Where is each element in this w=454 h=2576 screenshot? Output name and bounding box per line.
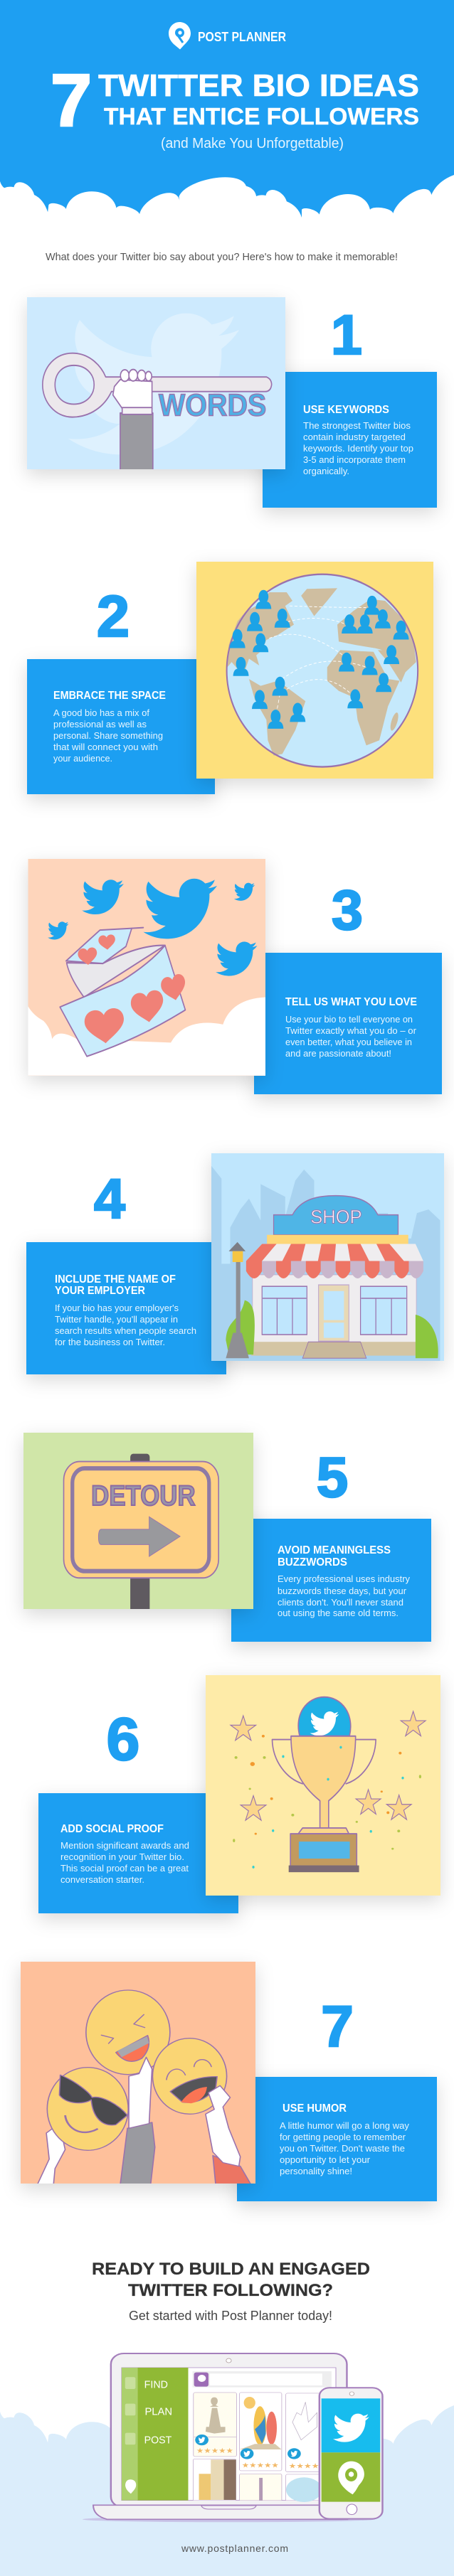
- number 1: 1: [331, 303, 362, 366]
- illustration: globe with people: [196, 562, 433, 779]
- number 4: 4: [94, 1167, 125, 1230]
- text card: use humor: [237, 2077, 437, 2201]
- small tower and globe: [259, 2478, 263, 2501]
- intro sentence: What does your Twitter bio say about you? Here's how to make it memorable!: [46, 251, 398, 263]
- text card: tell us what you love: [254, 953, 442, 1094]
- text card: include the name of your employer: INCLUDE THE NAME OF: [55, 1273, 176, 1286]
- text card: use humor: you on Twitter. Don't waste the: [280, 2143, 405, 2154]
- text card: add social proof: Mention significant awards and: [60, 1840, 189, 1851]
- text card: tell us what you love: Twitter exactly what you do – or: [285, 1025, 417, 1036]
- phone: [320, 2388, 383, 2519]
- call to action heading: READY TO BUILD AN ENGAGED: [92, 2260, 370, 2279]
- website address: www.postplanner.com: [181, 2543, 288, 2554]
- number 5: 5: [317, 1445, 348, 1509]
- text card: tell us what you love: and are passionate about!: [285, 1048, 391, 1059]
- text card: include the name of your employer: for the business on Twitter.: [55, 1337, 165, 1347]
- dove: [292, 2402, 317, 2440]
- number 2: 2: [97, 583, 130, 649]
- text card: tell us what you love: even better, what you believe in: [285, 1037, 412, 1047]
- text card: use keywords: 3-5 and incorporate them: [303, 454, 406, 465]
- text card: include the name of your employer: [26, 1242, 226, 1374]
- illustration: detour sign: [23, 1433, 253, 1624]
- text card: add social proof: recognition in your Twitter bio.: [60, 1851, 184, 1862]
- text card: embrace the space: personal. Share something: [53, 730, 163, 741]
- text card: use humor: personality shine!: [280, 2166, 352, 2176]
- tip 4 panel: [26, 1153, 444, 1374]
- laptop: FIND: [144, 2379, 168, 2390]
- surfboards: [244, 2397, 255, 2409]
- illustration: laptop and phone: [83, 2353, 383, 2522]
- illustration: birds with heart ribbon: [28, 859, 265, 1076]
- text card: include the name of your employer: YOUR EMPLOYER: [55, 1285, 145, 1297]
- text card: avoid meaningless buzzwords: out using the same old terms.: [278, 1608, 398, 1618]
- text card: avoid meaningless buzzwords: AVOID MEANINGLESS: [278, 1544, 391, 1556]
- logo: Post Planner: [169, 22, 286, 50]
- text card: add social proof: This social proof can be a great: [60, 1863, 189, 1874]
- illustration: shop front: [211, 1153, 444, 1361]
- text card: use humor: opportunity to let your: [280, 2154, 371, 2165]
- text card: add social proof: conversation starter.: [60, 1874, 144, 1885]
- text card: use keywords: keywords. Identify your top: [303, 443, 413, 454]
- illustration: detour sign: DETOUR: [91, 1479, 196, 1511]
- text card: tell us what you love: Use your bio to tell everyone on: [285, 1014, 413, 1025]
- chess pawn: [206, 2398, 226, 2434]
- laptop: ★★★★★: [242, 2461, 279, 2469]
- illustration: key and words: WORDS: [159, 388, 266, 422]
- number 3: 3: [332, 878, 363, 941]
- logo: Post Planner: POST PLANNER: [198, 30, 286, 44]
- header banner with clouds: [0, 0, 454, 218]
- text card: avoid meaningless buzzwords: clients don't. You'll never stand: [278, 1597, 403, 1608]
- illustration: key and words: [27, 297, 285, 474]
- illustration: trophy with stars: [206, 1675, 440, 1896]
- text card: embrace the space: EMBRACE THE SPACE: [53, 690, 166, 702]
- laptop: POST: [144, 2435, 171, 2446]
- buildings: [211, 2459, 224, 2500]
- text card: use humor: for getting people to remember: [280, 2132, 406, 2142]
- illustration: emoji masks: [21, 1962, 255, 2185]
- tip 2 panel: [27, 562, 433, 794]
- text card: tell us what you love: TELL US WHAT YOU LOVE: [285, 996, 417, 1008]
- footer cloud background: [0, 2405, 454, 2576]
- text card: use keywords: organically.: [303, 466, 349, 476]
- text card: use keywords: The strongest Twitter bios: [303, 420, 411, 431]
- text card: use keywords: contain industry targeted: [303, 432, 406, 442]
- text card: embrace the space: professional as well as: [53, 719, 147, 729]
- tip 3 panel: [28, 859, 442, 1094]
- tip 5 panel: [23, 1433, 431, 1642]
- text card: use humor: USE HUMOR: [283, 2102, 347, 2115]
- text card: add social proof: ADD SOCIAL PROOF: [60, 1823, 164, 1835]
- illustration: shop front: SHOP: [310, 1207, 362, 1228]
- text card: avoid meaningless buzzwords: [231, 1519, 431, 1642]
- text card: avoid meaningless buzzwords: BUZZWORDS: [278, 1556, 347, 1568]
- title: TWITTER BIO IDEAS: [98, 68, 419, 103]
- text card: include the name of your employer: If your bio has your employer's: [55, 1303, 179, 1313]
- text card: use keywords: USE KEYWORDS: [303, 404, 389, 416]
- tip 6 panel: [38, 1675, 440, 1913]
- title: THAT ENTICE FOLLOWERS: [104, 104, 419, 130]
- text card: embrace the space: [27, 659, 215, 794]
- text card: embrace the space: your audience.: [53, 753, 112, 764]
- laptop: [93, 2353, 347, 2519]
- text card: avoid meaningless buzzwords: Every professional uses industry: [278, 1573, 410, 1584]
- laptop: ★★★★: [289, 2462, 319, 2470]
- call to action heading: [92, 2260, 370, 2300]
- text card: embrace the space: that will connect you with: [53, 742, 158, 752]
- text card: add social proof: [38, 1793, 238, 1913]
- number 7: 7: [321, 1994, 354, 2059]
- call to action subheading: Get started with Post Planner today!: [129, 2308, 332, 2323]
- text card: avoid meaningless buzzwords: buzzwords these days, but your: [278, 1586, 407, 1596]
- text card: include the name of your employer: Twitter handle, you'll appear in: [55, 1314, 178, 1325]
- text card: use humor: A little humor will go a long way: [280, 2120, 409, 2131]
- text card: embrace the space: A good bio has a mix of: [53, 707, 149, 718]
- text card: include the name of your employer: search results when people search: [55, 1325, 196, 1336]
- call to action heading: TWITTER FOLLOWING?: [128, 2281, 333, 2300]
- tip 1 panel: [27, 297, 437, 508]
- title: [51, 60, 419, 142]
- laptop: ★★★★★: [196, 2447, 233, 2455]
- tip 7 panel: [21, 1962, 437, 2201]
- subtitle: (and Make You Unforgettable): [161, 136, 344, 151]
- text card: use keywords: [263, 372, 437, 508]
- number 6: 6: [107, 1706, 139, 1773]
- title: 7: [51, 60, 92, 142]
- laptop: PLAN: [144, 2406, 172, 2417]
